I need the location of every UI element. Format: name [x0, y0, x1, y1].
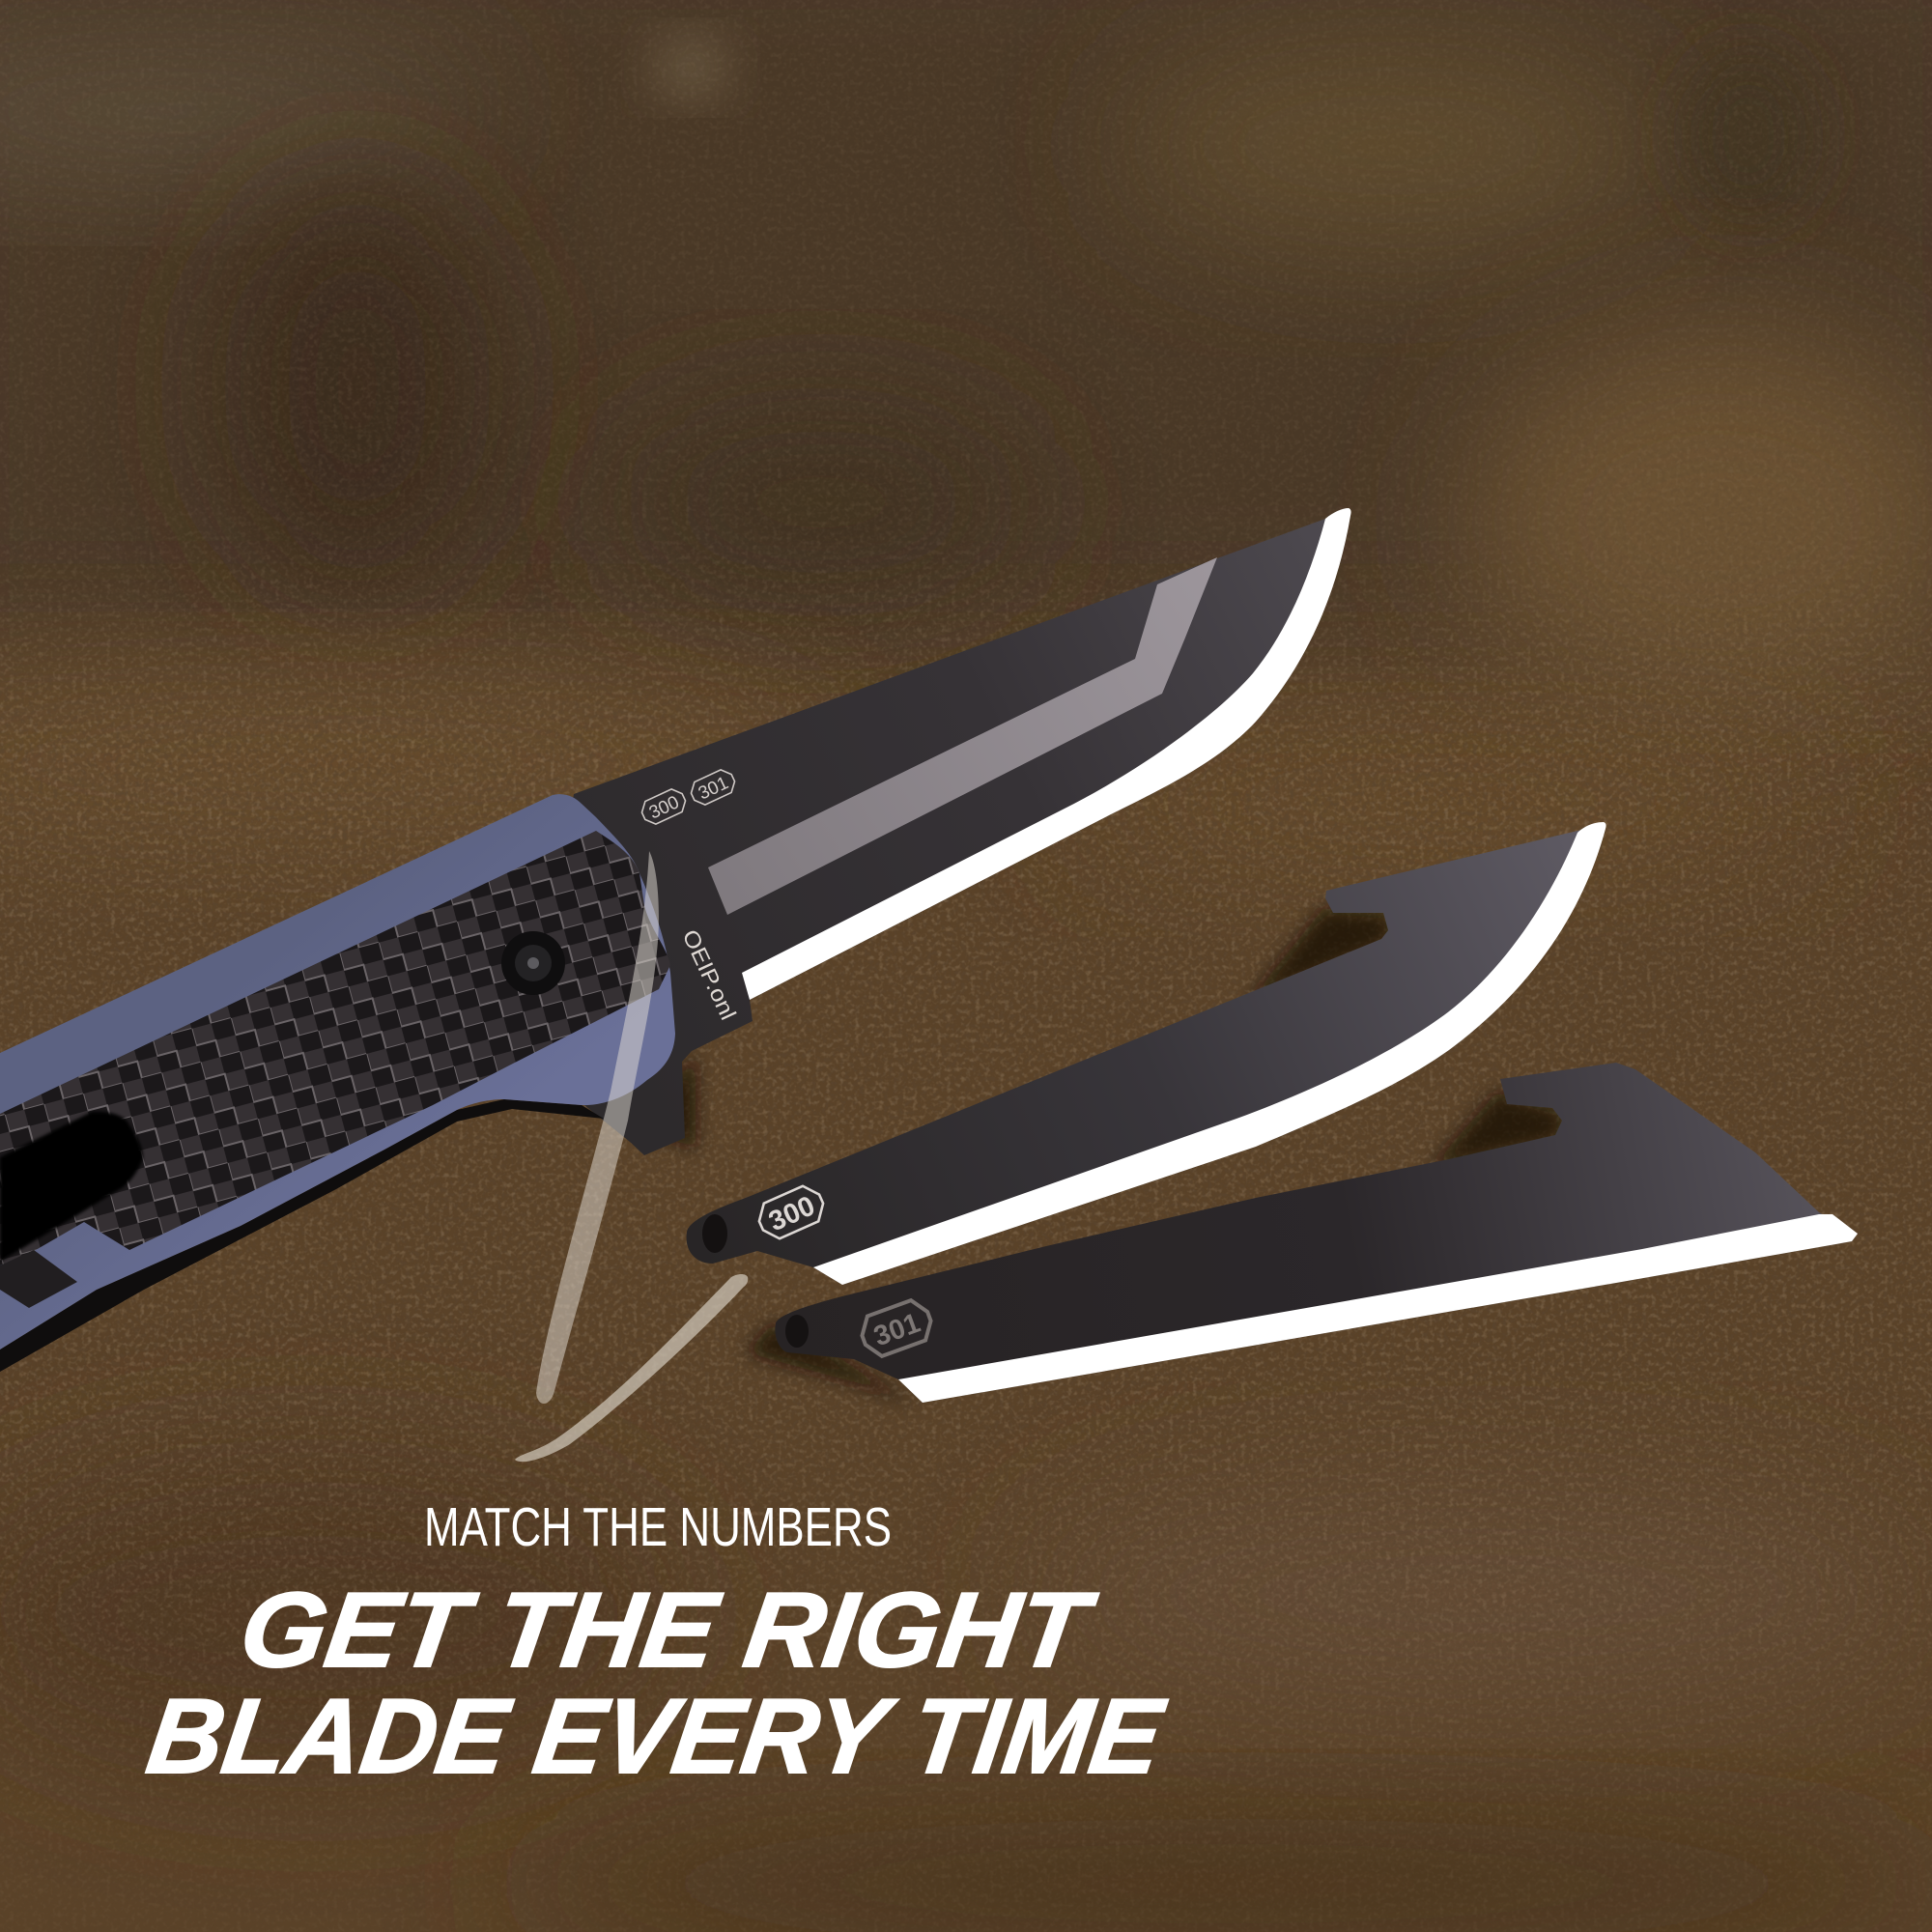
heading line 1: GET THE RIGHT — [234, 1571, 1103, 1690]
screw — [501, 931, 565, 995]
badge 301 — [857, 1296, 936, 1360]
blue scale — [0, 794, 675, 1350]
tanto grind — [708, 557, 1217, 915]
pivot hole — [785, 1315, 809, 1348]
carbon inlay — [0, 811, 696, 1275]
tang and flat — [560, 512, 1350, 1155]
white edge — [742, 508, 1351, 1000]
heading line 2: BLADE EVERY TIME — [141, 1677, 1172, 1796]
pointer to handle — [536, 851, 659, 1404]
pivot hole — [702, 1214, 727, 1253]
badge 300 — [753, 1181, 829, 1243]
replacement blade 301 — [775, 1063, 1858, 1403]
blade marking: OEIP.onl — [677, 925, 741, 1024]
white edge — [898, 1214, 1858, 1403]
badge 301: 301 — [696, 773, 731, 805]
subheading: MATCH THE NUMBERS — [424, 1496, 892, 1558]
arrow: pointer to number badges — [515, 851, 748, 1462]
badge 301 — [688, 766, 738, 809]
badge 300: 300 — [646, 792, 682, 824]
heading — [141, 1571, 1172, 1796]
badge 301: 301 — [869, 1308, 924, 1352]
white edge — [813, 822, 1606, 1285]
pointer to blades — [515, 1274, 748, 1462]
black liner — [0, 1099, 604, 1372]
badge 300 — [639, 785, 689, 828]
lanyard cut-out — [0, 1112, 143, 1262]
lower carbon piece — [0, 1250, 77, 1308]
badge 300: 300 — [764, 1190, 819, 1237]
main blade — [560, 508, 1351, 1155]
knife handle — [0, 794, 696, 1372]
blade shadows — [618, 908, 1565, 1406]
replacement blade 300 — [687, 822, 1606, 1285]
